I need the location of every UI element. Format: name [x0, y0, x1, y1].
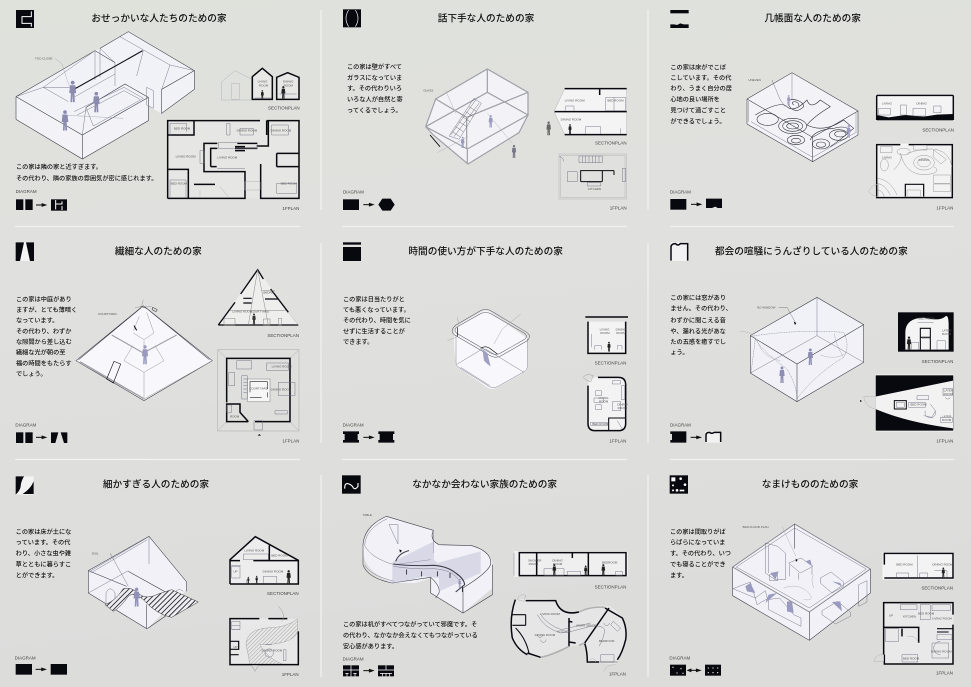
section drawing	[898, 312, 954, 352]
panel: family that rarely meets house	[342, 475, 627, 677]
diagram	[16, 432, 67, 443]
floor plan: ROOM	[230, 414, 240, 418]
body text: な隙間から差し込む	[16, 338, 72, 346]
body text: わり、小さな虫や雑	[16, 550, 71, 558]
floor plan	[583, 375, 628, 431]
floor plan: WORK SPACE	[576, 623, 596, 627]
body text: す。その代わり、いつ	[670, 550, 731, 558]
floor plan: BED ROOM	[918, 612, 935, 616]
isometric scattered-plan house	[733, 524, 870, 640]
body text: 繊細な光が朝の至	[16, 349, 65, 357]
diagram	[670, 199, 722, 210]
floor plan: ROOM	[599, 399, 609, 403]
floor plan: DINING ROOM	[262, 648, 283, 652]
diagram label: DIAGRAM	[670, 423, 691, 428]
section label: SECTIONPLAN	[922, 128, 954, 133]
section drawing: ROOM	[922, 336, 932, 340]
section drawing: LIVING	[258, 80, 268, 84]
title: おせっかいな人たちのための家	[91, 12, 227, 24]
body text: ょう。	[670, 350, 689, 357]
body text: の代わり、なかなか会えなくてもつながっている	[343, 631, 478, 639]
section drawing: DINING	[616, 328, 627, 332]
floor plan: LATER	[944, 389, 954, 393]
floor plan: LIVING ROOM	[272, 365, 292, 369]
body text: こしています。その代	[670, 74, 732, 82]
section drawing: BEDRM	[263, 290, 275, 294]
section label: SECTIONPLAN	[595, 140, 627, 145]
floor plan: KITCHEN	[903, 614, 916, 618]
section drawing: ROOM	[616, 331, 626, 335]
diagram	[670, 665, 721, 676]
body text: たの五感を癒すでし	[670, 338, 726, 346]
body text: ても悪くなっています。	[343, 307, 410, 314]
section label: SECTIONPLAN	[921, 586, 953, 591]
floor plan: BED ROOM	[592, 422, 609, 426]
section label: SECTIONPLAN	[595, 584, 626, 589]
section drawing: BED ROOM	[896, 563, 913, 567]
panel: poor time manager house	[343, 242, 628, 444]
floor plan: BED ROOM	[910, 403, 927, 407]
body text: この家は壁がすべて	[347, 63, 402, 71]
panel: precise person house	[670, 10, 954, 211]
floor plan: DINING ROOM	[271, 387, 292, 391]
plan label: 1FPLAN	[609, 439, 626, 444]
diagram label: DIAGRAM	[343, 423, 364, 428]
diagram label: DIAGRAM	[670, 190, 691, 195]
section drawing: BED ROOM	[918, 317, 935, 321]
diagram label: DIAGRAM	[15, 423, 37, 428]
icon: roof gap	[343, 242, 361, 261]
isometric soil-floor house	[88, 536, 198, 629]
body text: 福の時間をもたらす	[16, 359, 72, 367]
plan label: 1FPLAN	[609, 672, 626, 677]
section drawing: LATER	[942, 329, 952, 333]
section drawing: ROOM	[553, 562, 563, 566]
body text: らばらになっていま	[670, 539, 725, 547]
icon: scattered rooms	[670, 475, 688, 494]
floor plan: KITCHEN	[557, 630, 570, 634]
isometric glass house	[426, 69, 551, 164]
floor plan: BED ROOM	[171, 182, 187, 186]
floor plan: DINING	[919, 158, 930, 162]
section drawing	[585, 317, 628, 353]
section label: SECTIONPLAN	[922, 359, 953, 364]
section label: SECTIONPLAN	[267, 333, 299, 338]
body text: その代わり、隣の家族の雰囲気が密に感じれます。	[16, 175, 157, 183]
body text: ません。その代わり、	[670, 305, 732, 313]
section drawing: ROOM	[529, 562, 538, 566]
panel: lazy person house	[669, 475, 954, 676]
body text: いろな人が自然と寄	[347, 96, 403, 104]
body text: この家は間取りがば	[670, 528, 726, 536]
body text: ますが、とても薄暗く	[16, 306, 77, 314]
isometric rounded house	[447, 309, 529, 389]
isometric pyramid house	[76, 300, 212, 401]
floor plan	[229, 606, 298, 671]
diagram label: DIAGRAM	[343, 190, 364, 195]
floor plan	[559, 154, 627, 199]
body text: ができるでしょう。	[670, 117, 726, 125]
panel: too-fussy person house	[15, 476, 299, 677]
floor plan: ROOM	[942, 418, 952, 422]
floor plan: DINING ROOM	[237, 128, 258, 132]
section label: SECTIONPLAN	[267, 591, 299, 596]
title: 細かすぎる人のための家	[103, 478, 209, 490]
callout: table: TABLE	[363, 513, 372, 517]
callout: bad floor plan: BAD FLOOR PLAN	[743, 525, 769, 529]
body text: 安心感があります。	[343, 642, 398, 650]
section drawing: DINING ROOM	[561, 118, 582, 122]
section drawing: SHOWER	[528, 559, 542, 563]
isometric s-curve house	[362, 516, 492, 613]
floor plan: LATER	[942, 415, 952, 419]
section drawing: BED ROOM	[607, 98, 624, 102]
diagram label: DIAGRAM	[669, 656, 691, 661]
callout: soil: SOIL	[92, 551, 99, 555]
plan label: 1FPLAN	[282, 206, 299, 211]
panel: bad talker house	[343, 9, 627, 211]
body text: その代わり、わずか	[16, 327, 72, 335]
body text: この家は日当たりがと	[343, 295, 405, 303]
body text: 見つけて過ごすこと	[670, 106, 726, 114]
body text: でも寝ることができ	[670, 560, 726, 568]
callout: no window: NO WINDOW	[757, 305, 776, 309]
body text: この家には窓があり	[670, 294, 726, 302]
icon: tapered courtyard	[16, 242, 34, 261]
floor plan: DINING ROOM	[535, 633, 556, 637]
diagram label: DIAGRAM	[15, 656, 36, 661]
section drawing	[222, 68, 299, 100]
plan label: 1FPLAN	[610, 206, 627, 211]
isometric house	[16, 32, 194, 159]
panel: noise-tired person house	[670, 242, 954, 444]
icon: soil curve	[16, 476, 34, 495]
diagram	[16, 199, 67, 211]
callout: uneven: UNEVEN	[748, 78, 761, 82]
title: なまけもののための家	[762, 478, 859, 490]
section drawing	[218, 270, 298, 325]
floor plan: UP	[233, 645, 237, 649]
floor plan	[218, 350, 299, 436]
body text: この家は床が土にな	[16, 528, 71, 536]
floor plan: BED ROOM	[174, 127, 191, 131]
section drawing: LIVING ROOM	[244, 549, 265, 553]
floor plan: LIVING ROOM	[540, 612, 560, 616]
panel: busybody house	[16, 10, 300, 211]
section drawing: LIVING	[882, 102, 892, 106]
section drawing: DINING	[283, 80, 294, 84]
icon: floor profile	[670, 10, 689, 28]
body text: や、漏れる光があな	[670, 327, 726, 335]
floor plan: DINING ROOM	[271, 128, 292, 132]
body text: この家は床がでこぼ	[670, 63, 727, 71]
section drawing: BEDROOM	[602, 560, 618, 564]
body text: っています。その代	[16, 539, 71, 547]
floor plan	[869, 144, 953, 198]
section drawing: BED ROOM	[271, 553, 288, 557]
callout: glass: GLASS	[423, 89, 433, 93]
body text: ガラスになっていま	[347, 74, 402, 82]
body text: この家は隣の家と近すぎます。	[16, 163, 102, 171]
diagram	[670, 431, 721, 443]
icon: arch	[670, 242, 688, 261]
body text: わり、うまく自分の居	[670, 85, 732, 93]
body text: す。その代わりいろ	[347, 85, 402, 93]
body text: 草とともに暮らすこ	[16, 560, 71, 568]
floor plan: LIVING	[882, 156, 892, 160]
floor plan	[167, 121, 299, 198]
body text: ます。	[670, 572, 688, 579]
section label: SECTIONPLAN	[595, 361, 626, 366]
floor plan: BED ROOM	[281, 181, 297, 185]
floor plan	[511, 595, 626, 671]
section drawing	[876, 94, 954, 121]
body text: わずかに聞こえる音	[670, 317, 726, 325]
floor plan: COURTYARD	[249, 387, 269, 391]
floor plan: DINING	[617, 403, 628, 407]
section drawing: LIVING ROOM	[232, 309, 253, 313]
diagram label: DIAGRAM	[16, 189, 37, 194]
body text: なっています。	[16, 318, 58, 325]
section drawing: DINING ROOM	[932, 563, 953, 567]
body text: この家は中庭があり	[16, 295, 72, 303]
plan label: 1FPLAN	[282, 672, 299, 677]
section label: SECTIONPLAN	[268, 106, 300, 111]
section drawing: DINING	[552, 559, 563, 563]
section drawing: ROOM	[600, 331, 610, 335]
floor plan	[860, 375, 954, 431]
floor plan: DINING ROOM	[931, 650, 952, 654]
panel: sensitive person house	[15, 242, 299, 444]
diagram	[343, 431, 394, 443]
section drawing	[883, 552, 954, 579]
icon: house diagram	[16, 10, 34, 28]
body text: その代わり、時間を気に	[343, 317, 411, 325]
body text: できます。	[343, 339, 373, 346]
callout: courtyard: COURTYARD	[98, 312, 117, 316]
floor plan: BED ROOM	[903, 656, 920, 660]
plan label: 1FPLAN	[282, 439, 299, 444]
isometric windowless house	[740, 297, 864, 402]
section drawing: COURTYARD	[251, 309, 270, 313]
section drawing: ROOM	[942, 332, 952, 336]
section drawing: DINING ROOM	[263, 569, 284, 573]
section drawing	[554, 89, 627, 135]
title: 時間の使い方が下手な人のための家	[408, 245, 563, 257]
floor plan: BEDROOM	[599, 639, 615, 643]
floor plan	[874, 602, 954, 665]
title: なかなか会わない家族のための家	[412, 478, 557, 490]
diagram	[16, 664, 67, 675]
title: 話下手な人のための家	[438, 13, 535, 25]
icon: s-curve	[342, 475, 361, 494]
floor plan: ROOM	[944, 392, 953, 396]
floor plan: LIVING ROOM	[932, 617, 952, 621]
plan label: 1FPLAN	[936, 439, 953, 444]
plan label: 1FPLAN	[936, 206, 953, 211]
section drawing: UP	[233, 570, 237, 574]
plan label: 1FPLAN	[936, 671, 953, 676]
title: 都会の喧騒にうんざりしている人のための家	[715, 245, 908, 257]
title: 繊細な人のための家	[115, 245, 202, 257]
isometric uneven floor house	[747, 73, 858, 162]
callout: too close: TOO CLOSE	[35, 56, 52, 60]
body text: ってくるでしょう。	[347, 108, 402, 115]
section drawing: LIVING	[600, 328, 610, 332]
section drawing: DINING	[916, 102, 927, 106]
section drawing	[229, 536, 298, 584]
floor plan: UP	[889, 613, 893, 617]
section drawing: ROOM	[259, 83, 269, 87]
title: 几帳面な人のための家	[764, 13, 861, 25]
floor plan: LIVING ROOM	[176, 155, 196, 159]
section drawing	[514, 552, 627, 576]
icon: curved walls	[343, 9, 361, 27]
diagram	[343, 665, 394, 676]
floor plan: KITCHEN	[588, 187, 601, 191]
section drawing: ROOM	[284, 83, 293, 87]
floor plan: LIVING	[599, 396, 609, 400]
body text: この家は机がすべてつながっていて邪魔です。そ	[343, 620, 477, 628]
body text: 心地の良い場所を	[670, 96, 720, 104]
body text: でしょう。	[16, 371, 47, 378]
section drawing: LIVING ROOM	[565, 98, 585, 102]
floor plan: LIVING ROOM	[217, 155, 238, 159]
body text: とができます。	[16, 571, 58, 579]
diagram label: DIAGRAM	[343, 656, 364, 661]
diagram	[343, 199, 395, 211]
floor plan: ROOM	[618, 406, 627, 410]
body text: せずに生活することが	[343, 327, 406, 335]
